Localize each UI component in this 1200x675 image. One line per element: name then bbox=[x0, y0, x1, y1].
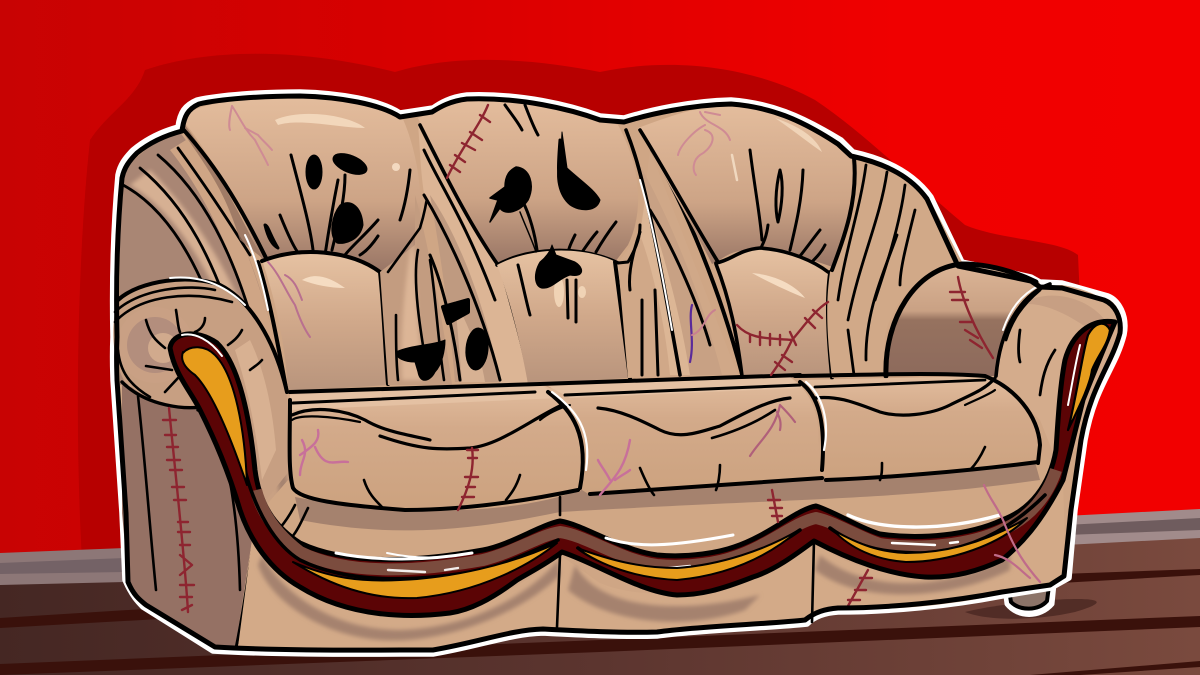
cushion 1 folds bbox=[182, 128, 410, 262]
sofa shadow on wall bbox=[78, 54, 1080, 560]
stitch: base bbox=[848, 570, 872, 606]
hole 7 bbox=[443, 300, 468, 323]
trim highlights bbox=[387, 542, 958, 572]
vein: cushion 3 bbox=[678, 112, 730, 175]
right side pleats panel bbox=[827, 156, 962, 378]
back cushion 3 bbox=[638, 104, 853, 268]
vein: seat 1 bbox=[300, 430, 348, 475]
hole 5 bbox=[558, 132, 600, 210]
hole 9 bbox=[396, 340, 445, 380]
hole 2 bbox=[330, 149, 370, 179]
orange segment 3 bbox=[833, 518, 1027, 562]
cushion 2 folds bbox=[420, 105, 618, 384]
stitch: rail bbox=[768, 490, 782, 522]
sofa outer black outline bbox=[117, 96, 1120, 650]
hole 4 bbox=[490, 167, 536, 252]
stitch: seat 1 bbox=[458, 448, 478, 510]
left arm front panel bbox=[122, 385, 300, 650]
lower cushion 1 outline bbox=[245, 235, 388, 388]
orange segment 2 bbox=[577, 530, 799, 580]
right arm bbox=[886, 264, 1121, 470]
hole 3 bbox=[332, 203, 363, 243]
seat rail and base front bbox=[262, 455, 1060, 562]
lower cushion 2 bbox=[497, 250, 630, 384]
back cushion 1 bbox=[182, 95, 420, 272]
hole 1 bbox=[306, 155, 322, 189]
stitch: lower cushion 3 bbox=[737, 302, 828, 345]
right arm roll bbox=[996, 285, 1121, 470]
sofa bbox=[113, 92, 1125, 654]
back cushion 2 bbox=[418, 98, 638, 385]
sofa foot bbox=[1005, 584, 1054, 614]
left arm roll bbox=[113, 277, 290, 505]
vein: seat 2 right bbox=[750, 405, 795, 456]
sofa silhouette bbox=[113, 92, 1125, 654]
vein: seat 2 bbox=[598, 440, 630, 495]
stitch: cushion 2 top bbox=[447, 105, 490, 178]
stitch: left panel bbox=[163, 408, 194, 612]
holes bbox=[306, 132, 600, 380]
lower base panel bbox=[238, 480, 1066, 652]
wooden floor bbox=[0, 537, 1200, 675]
vein: lower cushion 1 bbox=[268, 262, 310, 337]
stitch: right arm bbox=[950, 277, 993, 358]
vein: cushion 1 bbox=[229, 106, 272, 165]
seat cushion 1 bbox=[290, 384, 588, 510]
trim dark red body bbox=[170, 321, 1115, 615]
vein: base right bbox=[984, 485, 1040, 582]
seat cushion 3 bbox=[795, 374, 1040, 480]
trim brown band bbox=[256, 470, 1056, 569]
wooden trim bbox=[170, 321, 1115, 615]
baseboard left bbox=[0, 548, 125, 585]
left arm side pleats panel bbox=[120, 130, 285, 385]
orange segment 1 bbox=[293, 543, 557, 598]
orange left scroll bbox=[182, 347, 247, 485]
hole 8 bbox=[464, 327, 490, 371]
column between cushions 1 and 2 bbox=[380, 190, 452, 385]
seat highlights on rail bbox=[336, 515, 1000, 559]
fold strip under cushion 2 bbox=[418, 125, 528, 385]
seat cushion 2 bbox=[540, 375, 822, 495]
lower cushion 3 bbox=[715, 248, 832, 378]
stitches bbox=[163, 105, 993, 612]
cracks and veins bbox=[229, 106, 1040, 582]
hole 6 bbox=[535, 245, 582, 288]
trim black dividers bbox=[245, 470, 1045, 579]
lower cushion 1 bbox=[245, 235, 388, 392]
foot shadow on floor bbox=[965, 599, 1097, 619]
column between cushions 2 and 3 bbox=[618, 130, 742, 378]
baseboard right bbox=[1065, 509, 1200, 545]
pleat lines bbox=[123, 148, 260, 350]
vein: column bbox=[690, 305, 692, 362]
orange right scroll bbox=[1068, 324, 1110, 430]
floor plank lines bbox=[0, 569, 1200, 675]
